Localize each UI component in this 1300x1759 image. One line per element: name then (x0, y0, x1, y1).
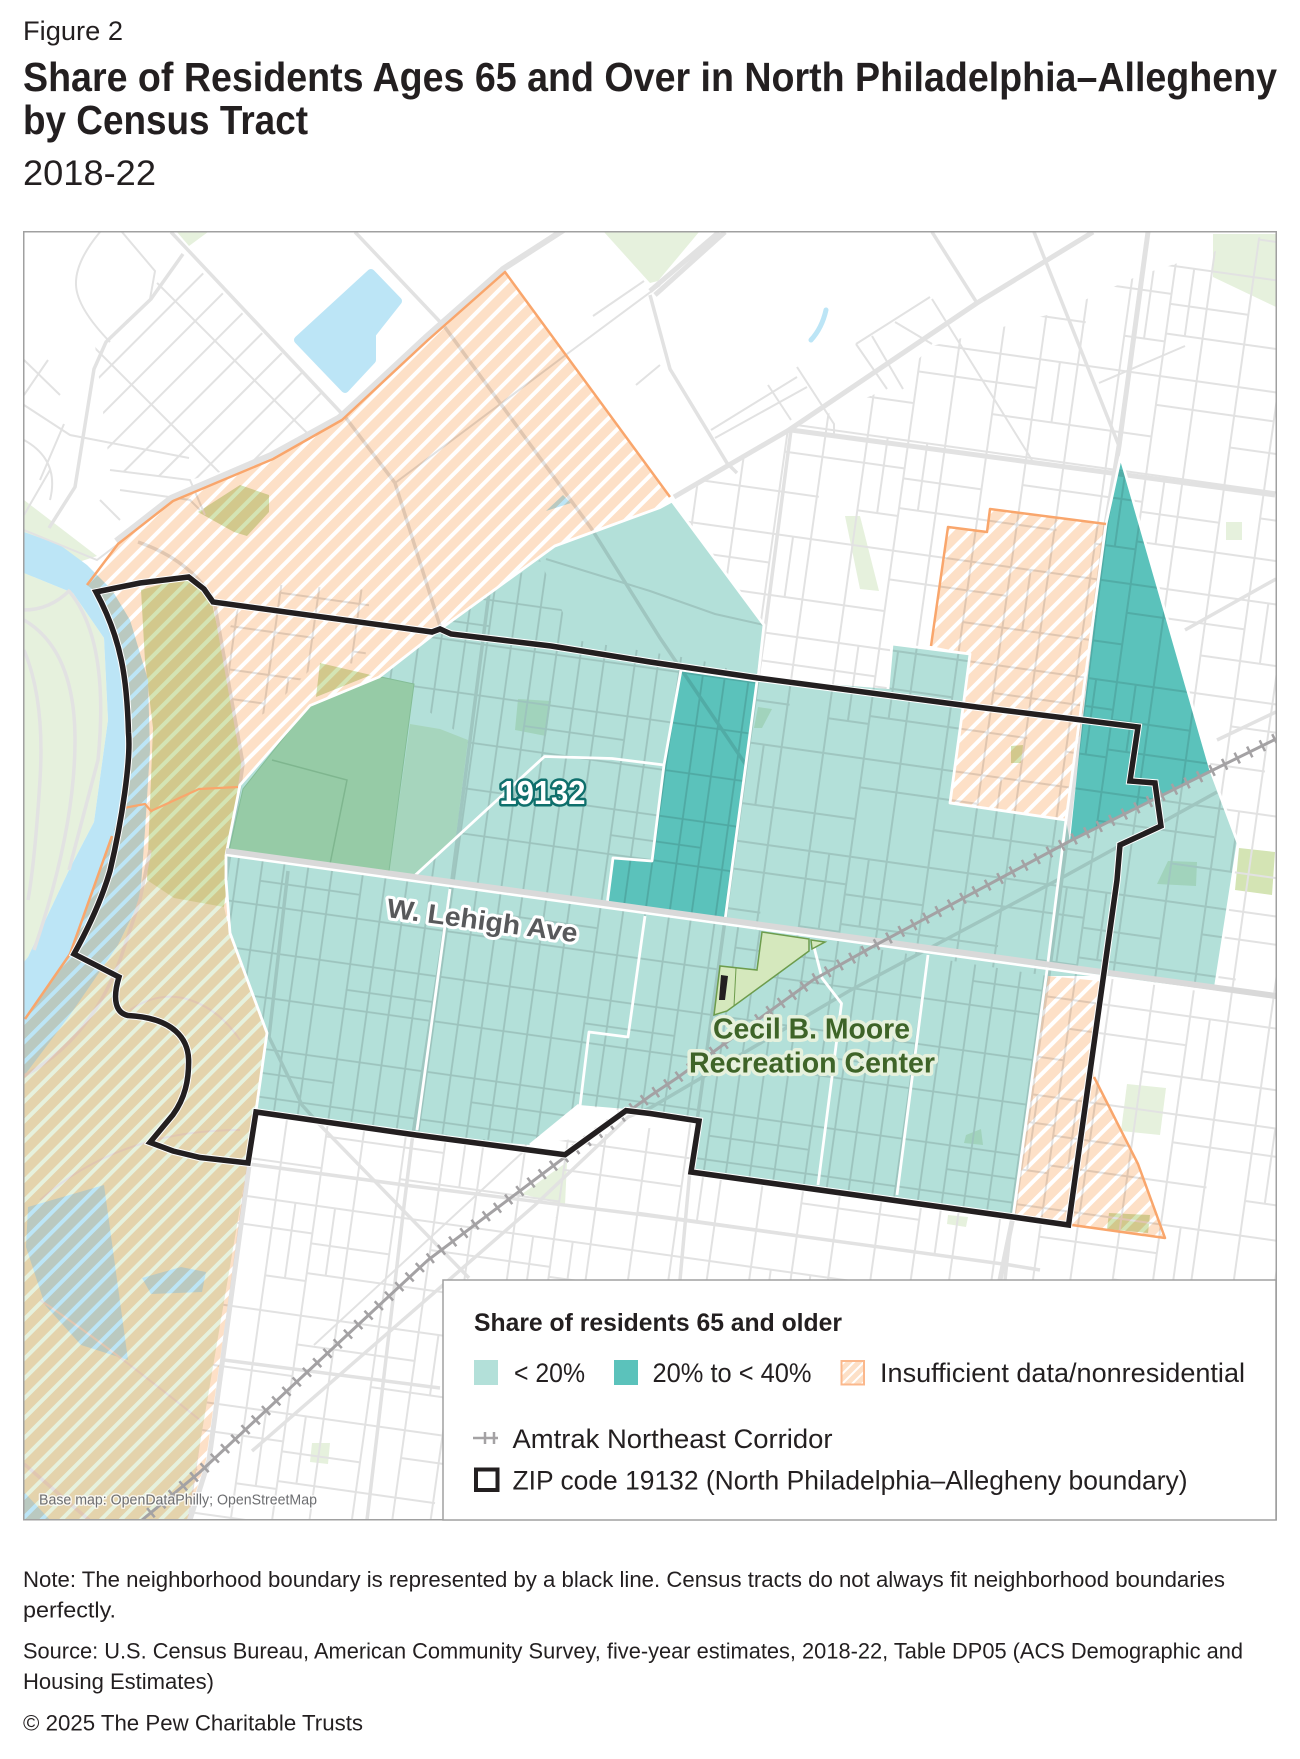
tracts: 20 to 40 percent (607, 457, 1211, 920)
source: Housing Estimates) (23, 1669, 214, 1694)
map frame (24, 232, 1276, 1520)
cemetery green (229, 677, 468, 880)
legend item: Amtrak: Amtrak Northeast Corridor (512, 1424, 833, 1454)
map (24, 229, 1276, 1520)
legend item: 20 to under 40 percent: 20% to < 40% (652, 1358, 812, 1388)
legend item: ZIP code boundary: ZIP code 19132 (North Philadelphia–Allegheny boundary) (512, 1466, 1188, 1496)
legend item: insufficient data: Insufficient data/nonresidential (880, 1358, 1245, 1388)
major roads (24, 229, 1276, 1520)
tract outlines (226, 457, 1238, 1217)
parks (24, 232, 1276, 1520)
road: W. Lehigh Ave (226, 851, 1276, 996)
tract: less than 20 percent (226, 501, 1238, 1217)
subtitle: 2018-22 (23, 154, 156, 193)
street grid (95, 232, 1276, 1520)
label: W. Lehigh Ave: W. Lehigh Ave (385, 893, 579, 948)
tracts: insufficient data (24, 272, 1165, 1520)
note: perfectly. (23, 1598, 116, 1622)
label: 19132: 19132 (500, 774, 586, 811)
credit: base map: Base map: OpenDataPhilly; OpenStreetMap (39, 1492, 317, 1508)
figure label: Figure 2 (23, 16, 123, 46)
park: Cecil B. Moore Recreation Center (714, 932, 825, 1015)
legend item: under 20 percent (474, 1358, 585, 1388)
rail line: Amtrak Northeast Corridor (142, 739, 1276, 1520)
label: Cecil B. Moore Recreation Center: Recreation Center (689, 1048, 935, 1080)
source: Source: U.S. Census Bureau, American Community Survey, five-year estimates, 2018-22, Table DP05 (ACS Demographic and (23, 1638, 1243, 1664)
legend item: under 20 percent: < 20% (514, 1358, 585, 1388)
neighborhood boundary (74, 577, 1161, 1225)
source (23, 1638, 1243, 1694)
label: Cecil B. Moore Recreation Center (689, 1014, 935, 1080)
legend title: Share of residents 65 and older (474, 1309, 842, 1337)
water (24, 273, 826, 1520)
copyright: © 2025 The Pew Charitable Trusts (23, 1710, 363, 1736)
note: Note: The neighborhood boundary is represented by a black line. Census tracts do not always fit neighborhood boundaries (23, 1567, 1225, 1592)
title (23, 54, 1277, 143)
title: by Census Tract (23, 97, 308, 143)
label: Cecil B. Moore Recreation Center: Cecil B. Moore (713, 1014, 910, 1046)
note (23, 1567, 1225, 1622)
orange tract borders (25, 272, 1165, 1238)
legend (443, 1280, 1276, 1520)
